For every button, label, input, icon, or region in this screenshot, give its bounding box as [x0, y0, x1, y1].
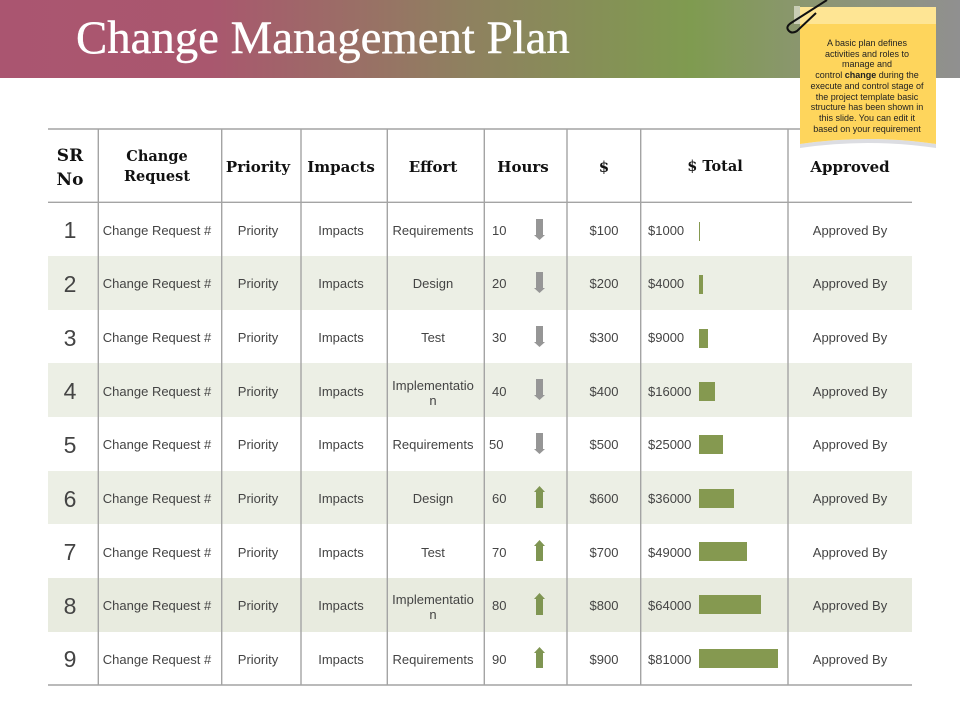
row 4	[48, 363, 912, 417]
row 6: Priority	[238, 491, 278, 506]
row 7: 70	[492, 545, 506, 560]
header: Change Request: Change	[126, 148, 188, 165]
row 9: $900	[590, 652, 618, 667]
row 4: n	[429, 393, 437, 408]
callout text: manage and	[842, 59, 892, 69]
row 6: $36000	[648, 491, 691, 506]
row 6: Approved By	[813, 491, 887, 506]
row 7	[64, 539, 888, 565]
row 4: $400	[590, 384, 618, 399]
row 6: 60	[492, 491, 506, 506]
row 9: 90	[492, 652, 506, 667]
row 8: Implementatio	[392, 592, 474, 607]
row 8: $800	[590, 598, 618, 613]
row 8: n	[429, 607, 437, 622]
sticky note callout	[786, 0, 936, 148]
row 3: Test	[421, 330, 445, 345]
header: SR No: SR	[57, 146, 83, 166]
row 4: $16000	[648, 384, 691, 399]
row 5: 5	[64, 432, 76, 458]
row 9: 9	[64, 646, 76, 672]
row 1: $100	[590, 223, 618, 238]
row 2: $200	[590, 276, 618, 291]
row 3: Change Request #	[103, 330, 211, 345]
callout text	[810, 38, 924, 134]
title: Change Management Plan	[76, 12, 570, 64]
callout text: structure has been shown in	[811, 102, 923, 112]
row 8: 80	[492, 598, 506, 613]
row 7: Priority	[238, 545, 278, 560]
row 6: Design	[413, 491, 453, 506]
icon: paperclip	[787, 0, 827, 32]
row 4: Change Request #	[103, 384, 211, 399]
row 6: Impacts	[318, 491, 364, 506]
row 8: Approved By	[813, 598, 887, 613]
header: Change Request	[124, 148, 190, 185]
row 9: Change Request #	[103, 652, 211, 667]
row 3: Approved By	[813, 330, 887, 345]
row 2: 20	[492, 276, 506, 291]
row 4: Approved By	[813, 384, 887, 399]
table header	[57, 146, 890, 190]
row 8: $64000	[648, 598, 691, 613]
row 5: $500	[590, 437, 618, 452]
callout text: A basic plan defines	[827, 38, 907, 48]
icon: down arrow, rows 1-5	[534, 219, 545, 454]
row 9: Priority	[238, 652, 278, 667]
row 6	[48, 471, 912, 524]
row 4: Implementatio	[392, 378, 474, 393]
row 2: Priority	[238, 276, 278, 291]
row 1: Requirements	[393, 223, 473, 238]
row 3: $9000	[648, 330, 684, 345]
title banner	[0, 0, 960, 78]
header: Hours: Hours	[497, 158, 549, 176]
row 1: 10	[492, 223, 506, 238]
row 2: $4000	[648, 276, 684, 291]
row 1: 1	[64, 217, 76, 243]
callout text: execute and control stage of	[810, 81, 924, 91]
row 3	[64, 325, 888, 351]
row 1	[64, 217, 888, 243]
row 9: $81000	[648, 652, 691, 667]
row 6: $600	[590, 491, 618, 506]
row 7: $700	[590, 545, 618, 560]
row 6: 6	[64, 486, 76, 512]
row 5	[64, 432, 888, 458]
row 1: Impacts	[318, 223, 364, 238]
callout text: the project template basic	[816, 92, 918, 102]
row 5: Impacts	[318, 437, 364, 452]
callout text: based on your requirement	[813, 124, 921, 134]
row 3: 3	[64, 325, 76, 351]
row 5: 50	[489, 437, 503, 452]
header: $: $	[599, 158, 609, 176]
row 7: $49000	[648, 545, 691, 560]
row 4: Priority	[238, 384, 278, 399]
row 2: Approved By	[813, 276, 887, 291]
row 9: Approved By	[813, 652, 887, 667]
row 7: Approved By	[813, 545, 887, 560]
row 2: Impacts	[318, 276, 364, 291]
row 7: Change Request #	[103, 545, 211, 560]
row 1: Change Request #	[103, 223, 211, 238]
callout text: this slide. You can edit it	[819, 113, 915, 123]
row 3: Priority	[238, 330, 278, 345]
row 4: 4	[64, 378, 76, 404]
row 8: Impacts	[318, 598, 364, 613]
row 1: Approved By	[813, 223, 887, 238]
header: SR No: No	[57, 170, 83, 190]
row 8	[48, 578, 912, 632]
row 4: Impacts	[318, 384, 364, 399]
row 2: 2	[64, 271, 76, 297]
row 9: Requirements	[393, 652, 473, 667]
header: Change Request: Request	[124, 168, 190, 185]
header: Priority: Priority	[226, 158, 290, 176]
row 9: Impacts	[318, 652, 364, 667]
header: $ Total: $ Total	[687, 158, 743, 175]
row 5: Change Request #	[103, 437, 211, 452]
row 8: Priority	[238, 598, 278, 613]
row 8: 8	[64, 593, 76, 619]
row 3: Impacts	[318, 330, 364, 345]
row 3: $300	[590, 330, 618, 345]
row 5: Requirements	[393, 437, 473, 452]
header: SR No	[57, 146, 84, 190]
row 1: Priority	[238, 223, 278, 238]
row 7: Test	[421, 545, 445, 560]
header: Impacts: Impacts	[307, 158, 375, 176]
row 7: 7	[64, 539, 76, 565]
row 6: Change Request #	[103, 491, 211, 506]
row 2: Design	[413, 276, 453, 291]
hours arrows	[534, 219, 545, 668]
row 2: Change Request #	[103, 276, 211, 291]
row 7: Impacts	[318, 545, 364, 560]
row 3: 30	[492, 330, 506, 345]
row 8: Change Request #	[103, 598, 211, 613]
row 1: $1000	[648, 223, 684, 238]
callout text: control change during the	[815, 70, 919, 80]
row 4: 40	[492, 384, 506, 399]
row 5: Approved By	[813, 437, 887, 452]
row 5: $25000	[648, 437, 691, 452]
row 2	[48, 256, 912, 310]
header: Effort: Effort	[409, 158, 457, 176]
callout text: activities and roles to	[825, 49, 909, 59]
icon: up arrow, rows 6-9	[534, 486, 545, 668]
row 5: Priority	[238, 437, 278, 452]
row 9	[64, 646, 888, 672]
header: Approved: Approved	[810, 158, 890, 176]
